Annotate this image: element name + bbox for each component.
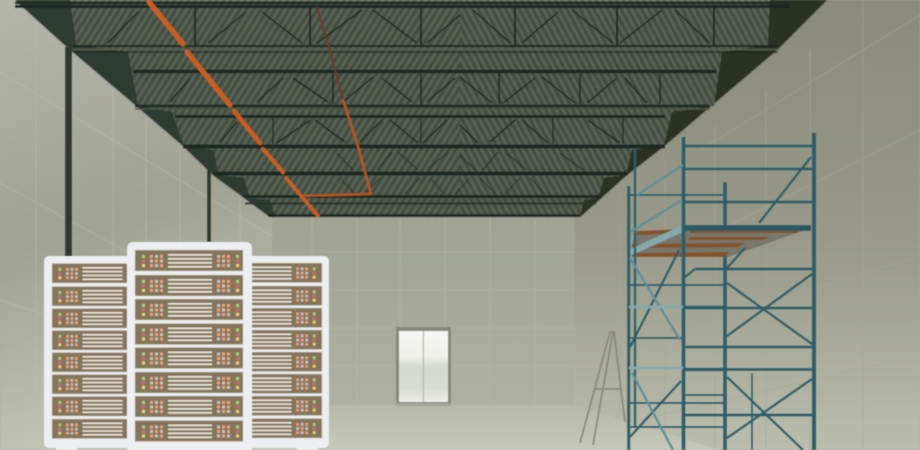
scaffold tower (628, 133, 814, 450)
rack: right (244, 256, 329, 450)
scaffold braces (629, 157, 812, 450)
roof trusses (108, 8, 714, 194)
floor (120, 405, 720, 450)
server racks (44, 242, 329, 450)
orange pipes (149, 2, 371, 216)
roof beams (15, 3, 790, 216)
scaffold frames (629, 133, 814, 450)
back wall (265, 210, 585, 406)
left wall columns (65, 47, 211, 257)
left wall (0, 0, 272, 450)
rack: center (127, 242, 252, 450)
step ladder (580, 332, 625, 445)
ceiling (15, 0, 827, 217)
rack: left (44, 256, 134, 450)
door (396, 327, 451, 406)
scaffold platform (628, 225, 811, 257)
right wall (575, 0, 920, 450)
